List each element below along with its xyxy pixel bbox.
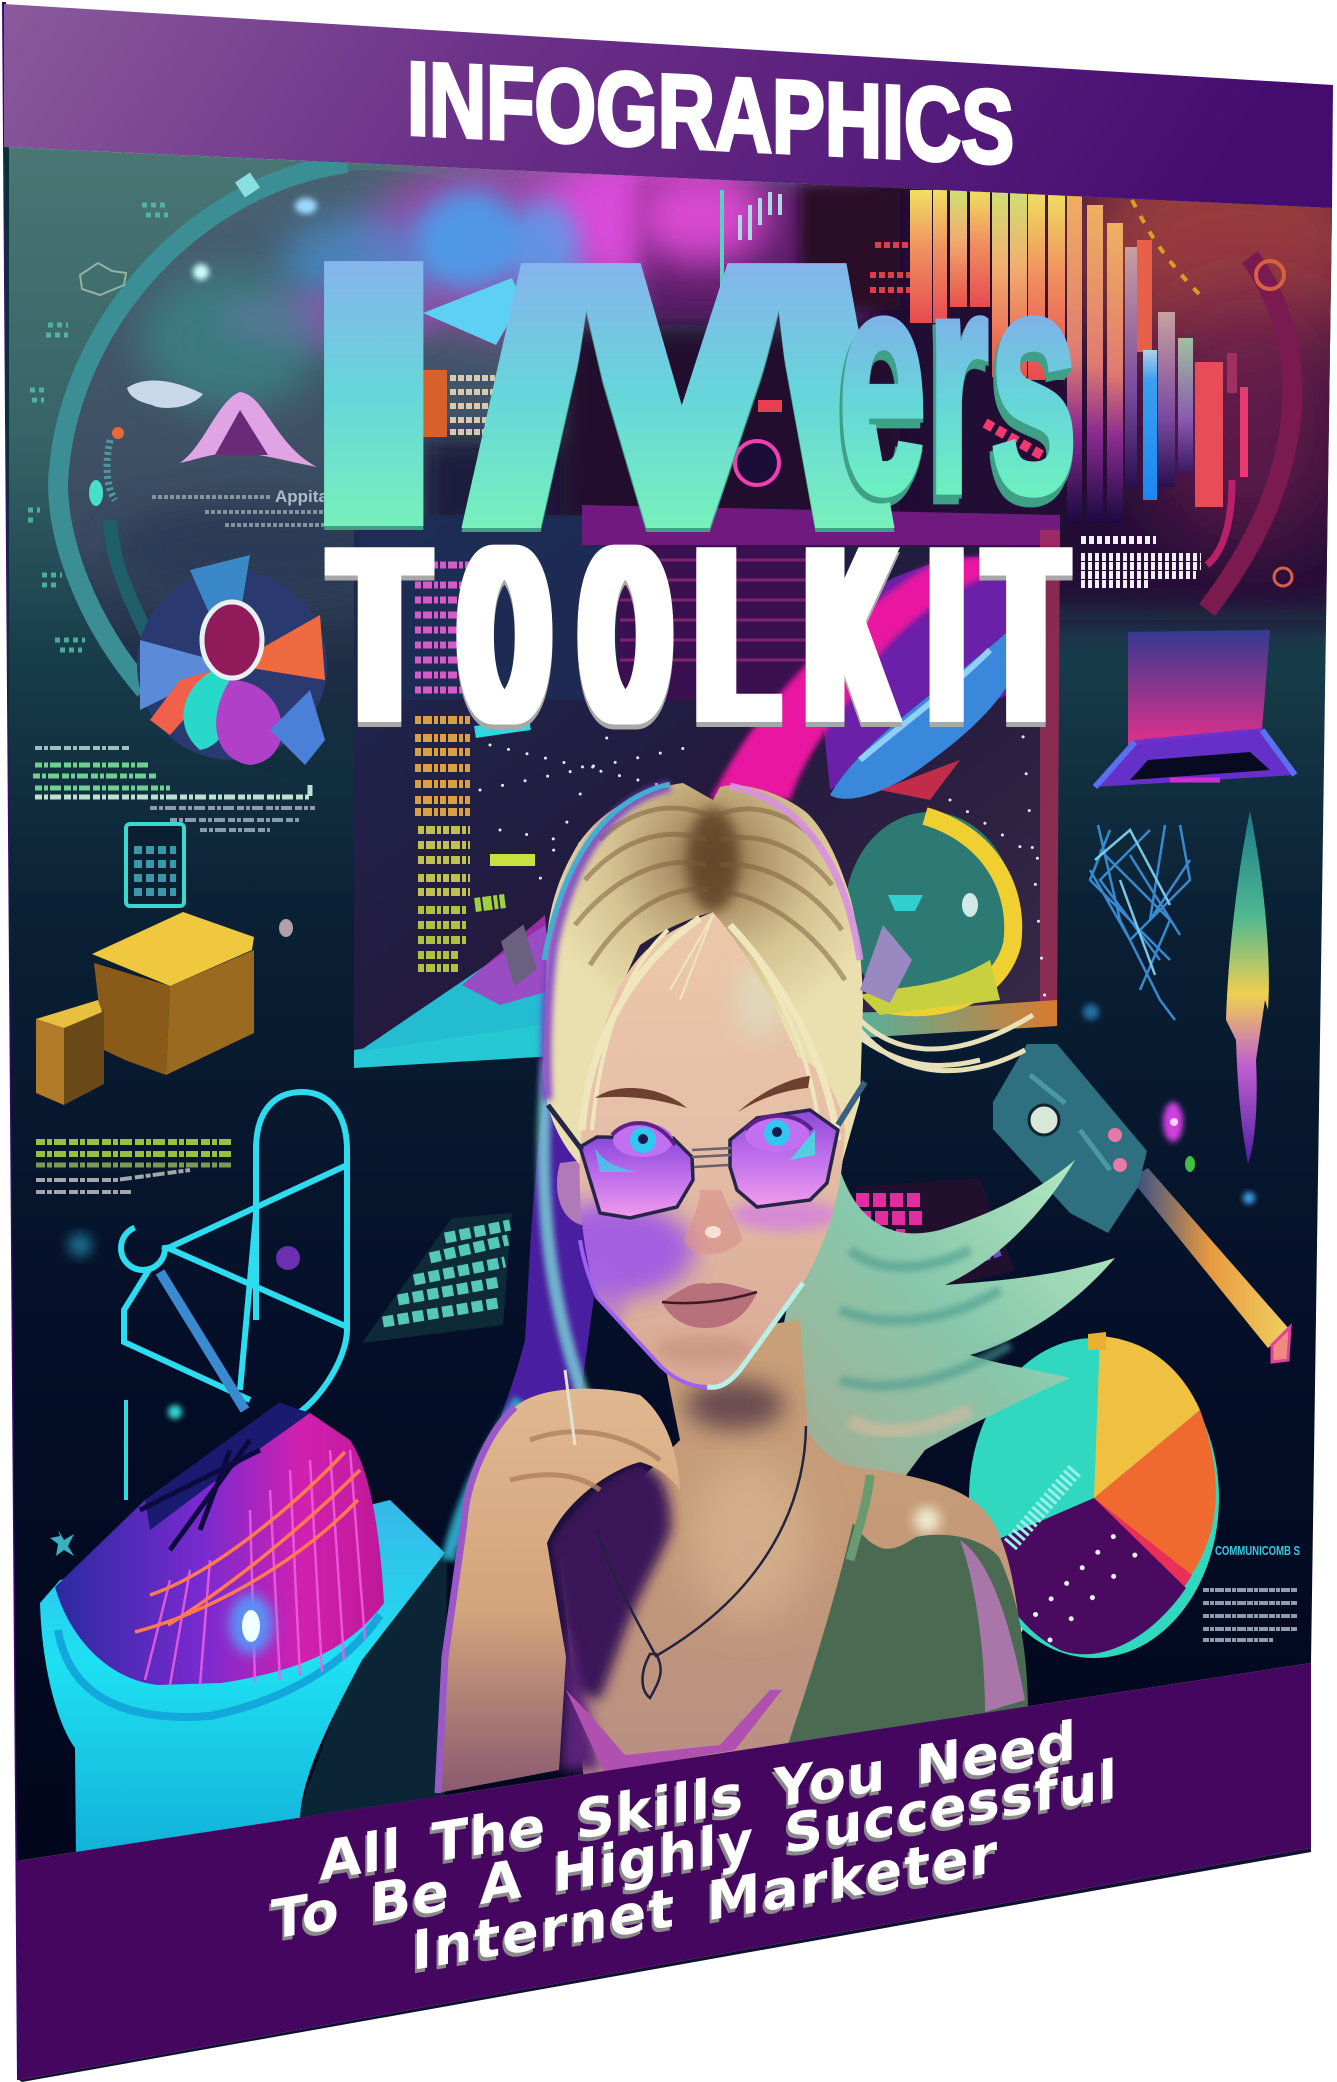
gibberish text block left (33, 748, 315, 830)
TOOLKIT: L (699, 493, 775, 777)
line 3: Internet Marketer (412, 1822, 997, 1983)
hair top (543, 783, 863, 1170)
woman (438, 783, 1115, 1793)
line 2: To Be A Highly Successful (271, 1748, 1117, 1952)
text block bottom right (1203, 1543, 1300, 1640)
TOOLKIT: O (463, 494, 546, 777)
eyebrows (595, 1088, 687, 1108)
keyboards (362, 1178, 1015, 1343)
top banner (4, 4, 1333, 208)
crystal sphere: Appital (275, 487, 333, 506)
bottom banner (17, 1663, 1311, 2080)
right upper glow (850, 110, 1337, 620)
green top (782, 1523, 1028, 1762)
tablet (126, 824, 184, 906)
text block bottom right: COMMUNICOMB S (1215, 1543, 1300, 1558)
pink top (566, 1690, 782, 1772)
monitor (354, 505, 1060, 1068)
moon sphere (848, 812, 1005, 988)
code window behind logo (423, 165, 925, 535)
upper flyaway strands (835, 985, 1033, 1071)
stars (478, 735, 1046, 996)
lips (662, 1283, 757, 1328)
pie flower icon (137, 555, 327, 765)
face (580, 912, 845, 1387)
small teal icons (28, 205, 168, 650)
letters ers: ers (838, 203, 1078, 560)
arm and hand (438, 1389, 680, 1793)
flowing hair (770, 1160, 1115, 1510)
bangs strands (582, 915, 838, 1140)
data grid (1081, 540, 1201, 584)
I M logo (278, 178, 1078, 610)
laptop (1095, 630, 1295, 787)
glasses (548, 1082, 865, 1218)
neck and chest (560, 1320, 1025, 1790)
flame streak (1226, 811, 1269, 1164)
cyan bucket (40, 1400, 445, 1860)
TOOLKIT (334, 492, 1063, 777)
letter M: M (357, 179, 951, 610)
gold boxes (36, 912, 293, 1105)
TOOLKIT: O (584, 494, 667, 777)
wireframe (68, 1092, 347, 1420)
code column (415, 565, 535, 968)
green text block (36, 1142, 234, 1192)
hammer (993, 1044, 1290, 1362)
nose (684, 1190, 742, 1254)
back hair left (445, 1000, 610, 1555)
TOOLKIT: K (809, 492, 893, 776)
necklace (597, 1426, 806, 1698)
bar skyline (910, 190, 1248, 523)
pie chart (969, 1332, 1219, 1658)
jacket (292, 1553, 447, 1830)
INFOGRAPHICS heading: INFOGRAPHICS (407, 41, 1014, 187)
red arc (1132, 200, 1292, 610)
pink scatter marks (985, 423, 1045, 457)
crystal sphere (48, 161, 734, 717)
purple wires (55, 1403, 384, 1685)
hair clips (486, 919, 552, 992)
glowing orbs (1083, 1004, 1255, 1204)
neural web (1090, 825, 1190, 1020)
letter I: I (278, 178, 469, 608)
TOOLKIT: T (334, 493, 425, 777)
line 1: All The Skills You Need (320, 1709, 1076, 1893)
left ear (557, 1160, 584, 1225)
TOOLKIT: T (989, 493, 1063, 777)
letter M: M (401, 180, 1014, 610)
subtitle (271, 1709, 1117, 1983)
ribbon swoosh (710, 557, 1035, 800)
eyes (595, 1116, 815, 1172)
TOOLKIT: I (935, 494, 958, 777)
